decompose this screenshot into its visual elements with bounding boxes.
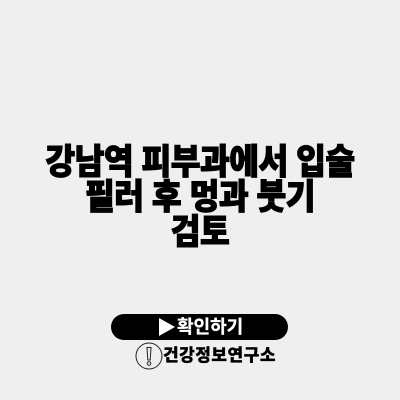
brand name: 건강정보연구소 <box>163 346 276 365</box>
button label: 확인하기 <box>177 317 243 337</box>
confirm button <box>111 314 288 340</box>
title: 필러 후 멍과 붓기 <box>85 178 315 217</box>
title <box>45 143 355 252</box>
brand logo <box>136 342 276 370</box>
icon: exclamation circle <box>136 342 162 370</box>
title: 강남역 피부과에서 입술 <box>45 143 355 182</box>
title: 검토 <box>171 213 229 252</box>
icon: play triangle <box>159 318 175 336</box>
